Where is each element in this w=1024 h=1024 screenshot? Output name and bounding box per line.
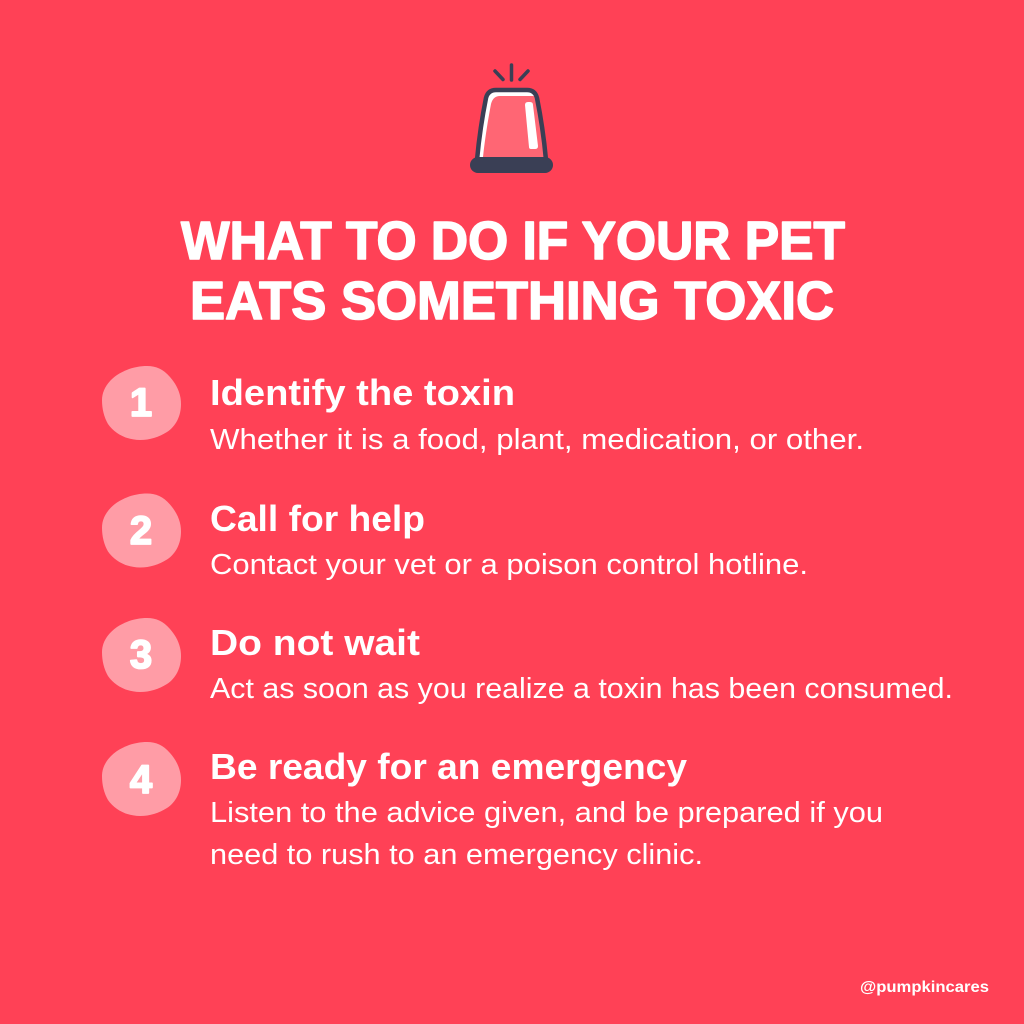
step 2 [102,494,808,581]
title [181,211,845,331]
step 4 heading: Be ready for an emergency [210,746,687,787]
step 3 [102,618,953,705]
title: EATS SOMETHING TOXIC [190,271,834,331]
step 3 text: Act as soon as you realize a toxin has been consumed. [210,673,953,705]
step 2 heading: Call for help [210,498,425,539]
step 4 text: Listen to the advice given, and be prepared if you [210,797,883,829]
number badge 2 [102,494,181,568]
step 1 [102,366,864,456]
icon: alarm siren [470,65,553,173]
step 2 text: Contact your vet or a poison control hotline. [210,549,808,581]
title: WHAT TO DO IF YOUR PET [181,211,845,271]
step 1 text: Whether it is a food, plant, medication, or other. [210,424,864,456]
number badge 4: 4 [130,758,153,802]
step 4 text: need to rush to an emergency clinic. [210,839,703,871]
step 4 text [210,797,883,871]
step 4 [102,742,883,871]
number badge 1: 1 [130,381,152,425]
number badge 3: 3 [130,633,152,677]
number badge 2: 2 [130,509,152,553]
handle: @pumpkincares [860,979,989,996]
number badge 3 [102,618,181,692]
number badge 1 [102,366,181,440]
number badge 4 [102,742,181,816]
step 1 heading: Identify the toxin [210,372,515,413]
step 3 heading: Do not wait [210,622,420,663]
